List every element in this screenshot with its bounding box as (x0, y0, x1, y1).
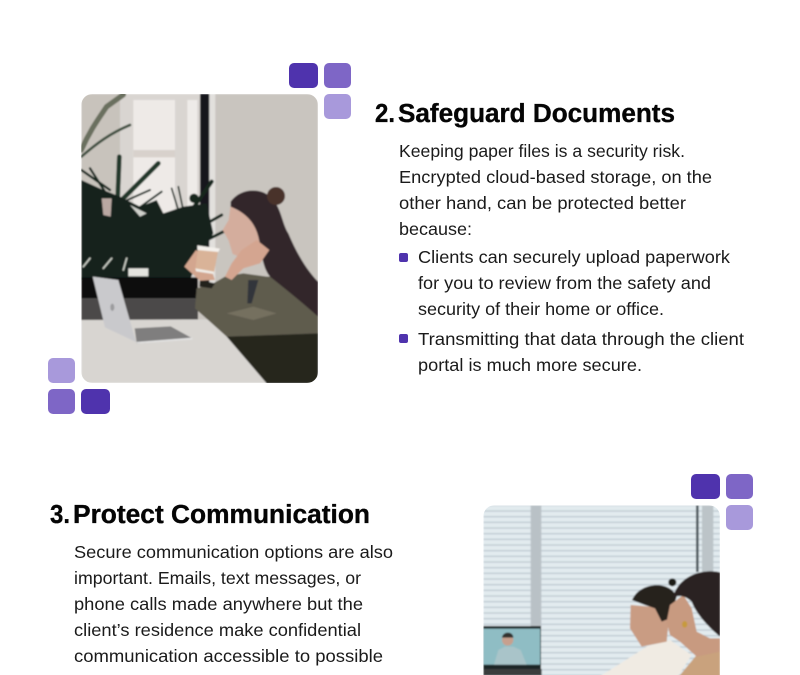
plant (81, 95, 223, 280)
text block: safeguard intro: Encrypted cloud-based storage, on the (399, 167, 712, 187)
woman (184, 187, 318, 383)
laptop with video call (483, 626, 542, 675)
text block: safeguard intro: because: (399, 219, 472, 239)
heading: 3. Protect Communication: 3. (50, 501, 70, 529)
decorative squares: section 3 top right (691, 474, 753, 530)
text block: protect communication: Secure communication options are also (74, 542, 393, 562)
text block: protect communication: important. Emails, text messages, or (74, 568, 361, 588)
woman (667, 571, 720, 675)
text block: protect communication: client’s residence make confidential (74, 620, 361, 640)
window sill (81, 277, 198, 321)
wall and window (81, 94, 318, 320)
bullet list: safeguard reasons: portal is much more secure. (418, 355, 642, 375)
text block: safeguard intro: Keeping paper files is a security risk. (399, 141, 685, 161)
bullet list: safeguard reasons: Clients can securely upload paperwork (418, 247, 730, 267)
heading: 3. Protect Communication: Protect Communication (73, 501, 370, 529)
table (81, 319, 268, 383)
text block: protect communication (74, 542, 393, 666)
heading: 2. Safeguard Documents: 2. (375, 100, 395, 128)
man (597, 578, 692, 675)
text block: safeguard intro: other hand, can be protected better (399, 193, 686, 213)
photo: video meeting by window blinds (483, 505, 720, 675)
bullet list: safeguard reasons (399, 247, 744, 375)
text block: protect communication: phone calls made anywhere but the (74, 594, 363, 614)
decorative squares: section 2 top right (289, 63, 351, 119)
text block: protect communication: communication accessible to possible (74, 646, 383, 666)
window blinds (483, 505, 720, 675)
decorative squares: section 2 bottom left (48, 358, 110, 414)
bullet list: safeguard reasons: Transmitting that data through the client (418, 329, 744, 349)
text block: safeguard intro (399, 141, 712, 239)
coffee cup (195, 245, 220, 274)
photo: woman with coffee at laptop (81, 94, 318, 383)
heading: 2. Safeguard Documents: Safeguard Documents (398, 100, 675, 128)
bullet list: safeguard reasons: for you to review from the safety and (418, 273, 711, 293)
bullet list: safeguard reasons: security of their home or office. (418, 299, 664, 319)
laptop (93, 277, 192, 343)
